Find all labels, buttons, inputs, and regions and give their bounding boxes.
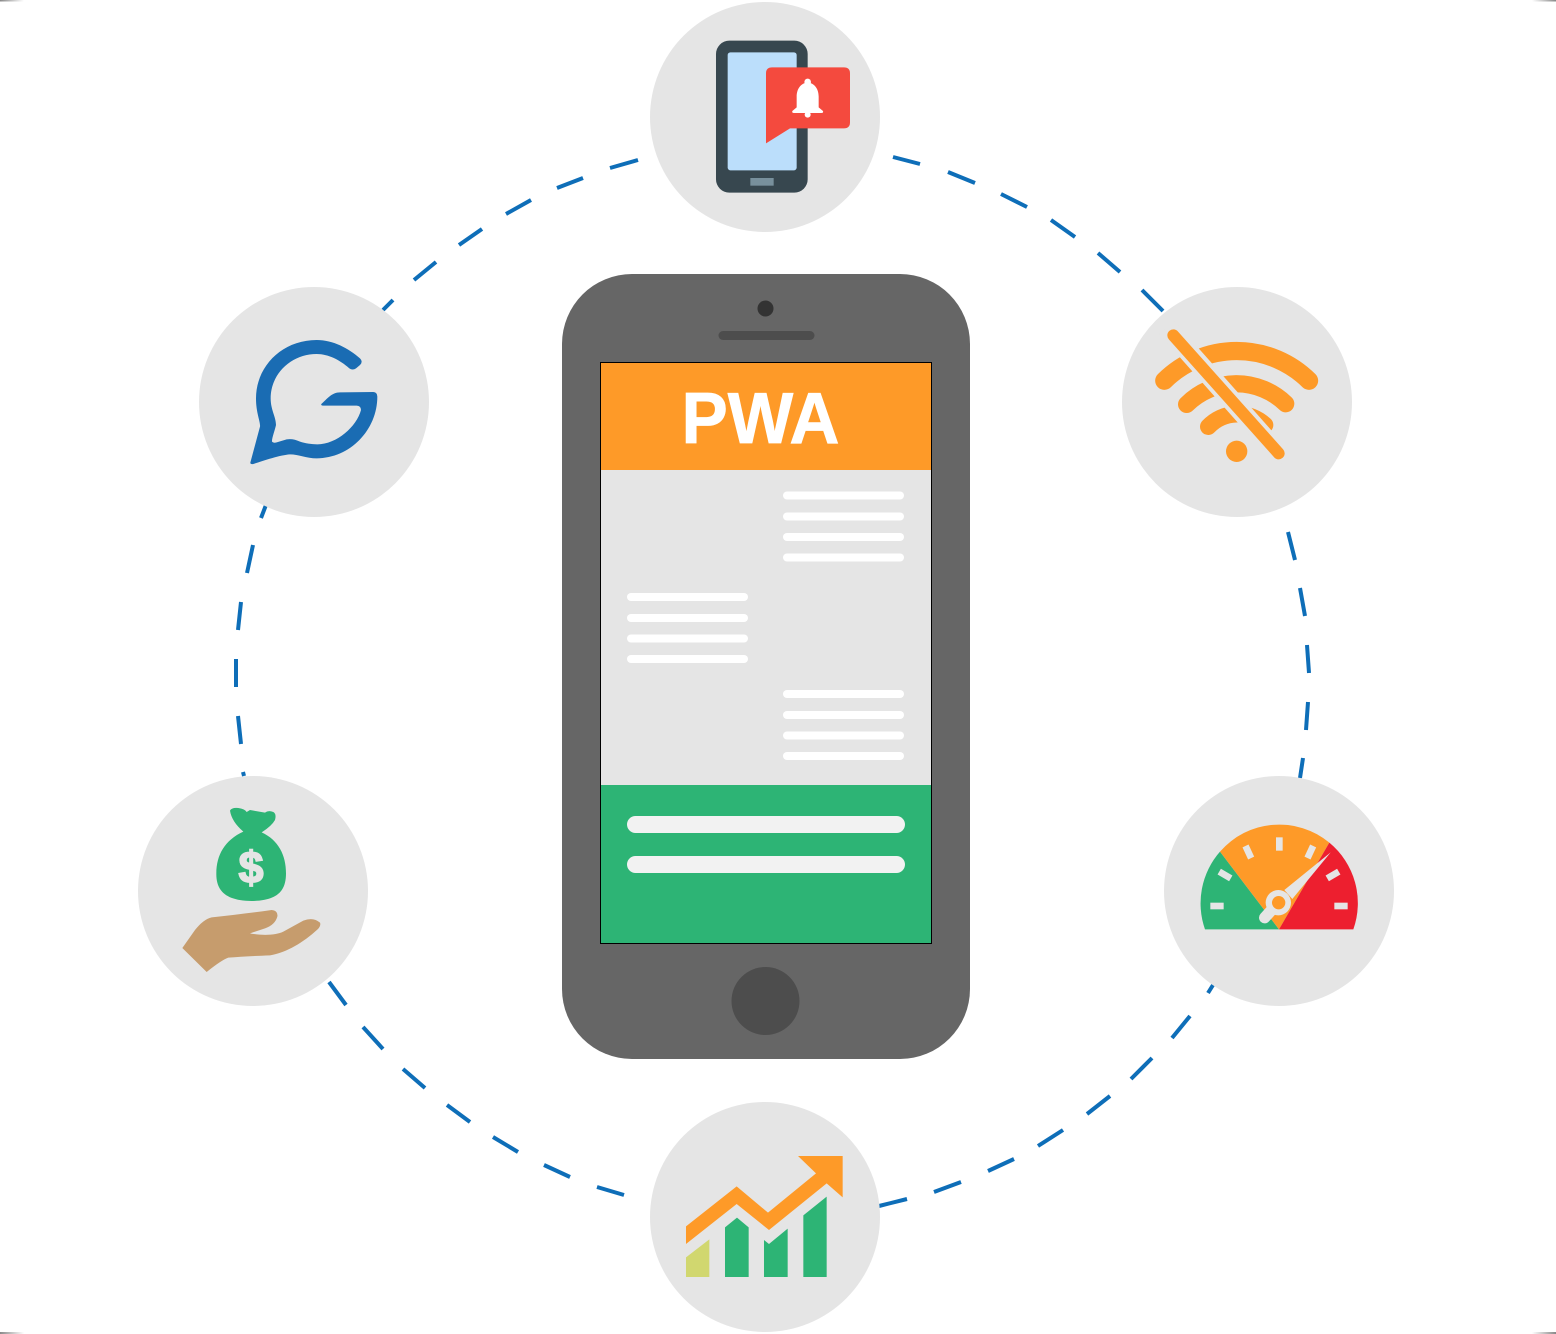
icon: money bag above hand: $	[239, 844, 264, 893]
panel: push notifications	[650, 2, 880, 232]
screen header: PWA: PWA	[682, 379, 840, 459]
panel: business growth	[650, 1102, 880, 1332]
text lines: upper right	[783, 492, 904, 562]
screen footer	[601, 785, 931, 943]
dashed ring connecting the benefit icons	[236, 157, 1309, 1206]
icon: crossed-out wifi	[1164, 327, 1309, 462]
panel: Google-style chat logo	[199, 287, 429, 517]
panel: cost savings	[138, 776, 368, 1006]
phone screen	[600, 362, 932, 944]
central phone	[562, 274, 970, 1059]
text lines: middle left	[627, 593, 748, 663]
text lines: lower right	[783, 690, 904, 760]
screen header: PWA	[601, 363, 931, 470]
icon: money bag above hand	[182, 808, 320, 972]
icon: rising bar chart with arrow	[686, 1156, 843, 1277]
panel: fast performance	[1164, 776, 1394, 1006]
camera	[758, 300, 774, 316]
icon: G speech bubble	[250, 340, 377, 464]
phone body	[562, 274, 970, 1059]
icon: phone with bell notification	[716, 41, 850, 193]
icon: speedometer gauge	[1201, 825, 1358, 929]
home button	[732, 967, 800, 1035]
panel: works offline	[1122, 287, 1352, 517]
speaker	[718, 331, 814, 340]
